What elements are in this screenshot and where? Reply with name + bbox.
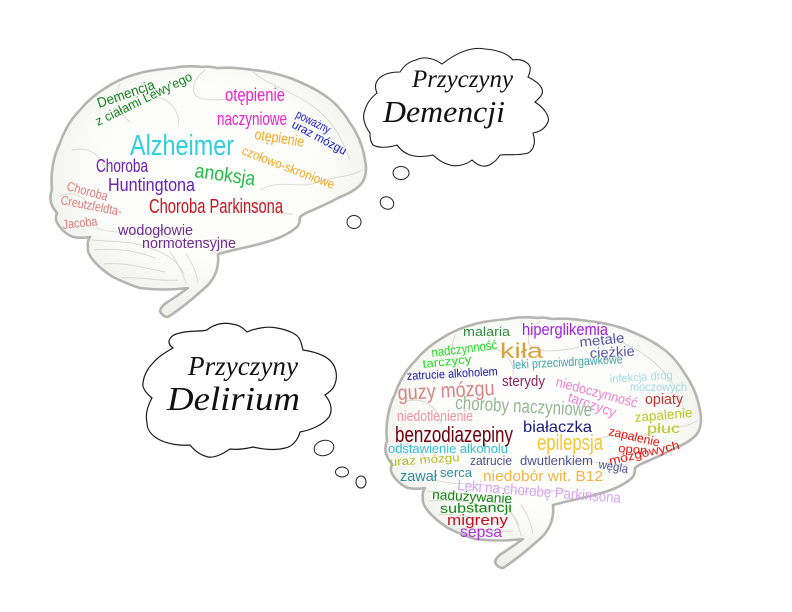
brain outline: [50, 66, 366, 317]
cause: urinary tract infection: moczowych: [630, 382, 687, 394]
cause: frontotemporal dementia: czołowo-skroniowe: [240, 143, 337, 192]
bubble outline: [143, 323, 336, 457]
cause: Lewy body dementia: Demencja: [95, 76, 157, 111]
cause: anticonvulsants: leki przeciwdrgawkowe: [512, 352, 623, 372]
cause: hypothyroidism: tarczycy: [566, 389, 619, 420]
brain outline: [385, 317, 701, 568]
cause: hyperthyroidism: nadczynność: [431, 337, 498, 360]
cause: hypothyroidism: niedoczynność: [554, 373, 640, 411]
cause: hyperglycemia: hiperglikemia: [522, 320, 608, 339]
cause: malaria: malaria: [463, 324, 511, 339]
cause: heavy metals: metale: [579, 329, 625, 350]
cause: carbon monoxide poisoning: dwutlenkiem: [520, 453, 593, 468]
cause: urinary tract infection: [609, 370, 687, 394]
cause: brain tumors: guzy mózgu: [397, 377, 495, 405]
heading: Przyczyny: Przyczyny: [411, 66, 514, 93]
brain: causes of dementia: [50, 66, 366, 317]
cause: vascular disease: choroby naczyniowe: [455, 393, 593, 421]
cause: frontotemporal dementia: otępienie: [253, 126, 305, 151]
cause: heavy metals: ciężkie: [589, 343, 635, 361]
cause: hyperthyroidism: [422, 337, 498, 371]
cause: migraine: migreny: [447, 512, 509, 529]
cause: urinary tract infection: infekcja dróg: [609, 370, 673, 386]
cause: Lewy body dementia: z ciałami Lewy'ego: [93, 69, 195, 129]
cause: meningitis: mózgowych: [608, 438, 681, 468]
cause: brain injury: uraz mózgu: [389, 452, 460, 469]
thought trail: delirium bubble: [312, 438, 366, 488]
cause: normal pressure hydrocephalus: wodogłowie: [117, 222, 193, 239]
cause: epilepsy: epilepsja: [537, 430, 604, 455]
cause: severe brain injury: uraz mózgu: [290, 117, 349, 158]
cause: carbon monoxide poisoning: węgla: [597, 457, 630, 476]
cause: normal pressure hydrocephalus: normotensyjne: [142, 235, 236, 252]
cause: leukemia: białaczka: [523, 419, 592, 436]
cause: Creutzfeldt-Jakob disease: Creutzfeldta-: [59, 192, 123, 219]
bubble outline: [364, 48, 548, 166]
cause: pneumonia: [634, 405, 693, 436]
cause: carbon monoxide poisoning: zatrucie: [470, 453, 512, 468]
cause: Creutzfeldt-Jakob disease: [59, 178, 123, 232]
cause: carbon monoxide poisoning: [470, 453, 630, 476]
cause: Huntington disease: [96, 156, 196, 195]
cause: pneumonia: płuc: [647, 420, 680, 436]
cause: meningitis: [607, 424, 681, 468]
cause: Huntington disease: Huntingtona: [108, 175, 196, 195]
cause: Parkinson disease: Choroba Parkinsona: [149, 196, 284, 218]
cause: Huntington disease: Choroba: [96, 156, 149, 176]
word cloud: causes of delirium: [388, 320, 693, 541]
cause: Creutzfeldt-Jakob disease: Choroba: [65, 178, 110, 204]
cause: vascular dementia: [217, 85, 287, 129]
cause: hyperthyroidism: tarczycy: [422, 352, 472, 371]
cause: steroids: sterydy: [502, 373, 545, 390]
cause: sepsis: sepsa: [460, 524, 502, 541]
cause: hypoxia: niedotlenienie: [397, 408, 473, 425]
cause: Parkinson medication: Leki na chorobę Parkinsona: [457, 477, 622, 507]
cause: heart attack: [400, 465, 473, 485]
cause: vascular dementia: otępienie: [225, 85, 285, 105]
cause: anoxia: anoksja: [193, 160, 258, 191]
cause: meningitis: zapalenie: [607, 424, 661, 450]
heading: Demencji: Demencji: [382, 94, 505, 129]
cause: vitamin B12 deficiency: niedobór wit. B12: [483, 468, 603, 485]
word cloud: causes of dementia: [59, 69, 349, 252]
cause: Alzheimer: Alzheimer: [130, 130, 234, 162]
cause: heart attack: zawał: [400, 468, 438, 485]
cause: severe brain injury: poważny: [294, 107, 333, 136]
heading: Delirium: Delirium: [166, 381, 300, 418]
thought bubble: causes of delirium: [143, 323, 336, 457]
cause: frontotemporal dementia: [240, 126, 337, 192]
cause: pneumonia: zapalenie: [634, 405, 693, 425]
cause: substance abuse: [432, 487, 513, 516]
cause: substance abuse: substancji: [440, 500, 512, 516]
thought trail: dementia bubble: [347, 166, 409, 228]
cause: alcohol withdrawal: odstawienie alkoholu: [388, 441, 508, 456]
heading: Przyczyny: Przyczyny: [187, 351, 298, 381]
cause: syphilis: kiła: [500, 340, 543, 363]
brain: causes of delirium: [385, 317, 701, 568]
cause: substance abuse: nadużywanie: [432, 487, 513, 506]
cause: benzodiazepines: benzodiazepiny: [395, 422, 513, 447]
cause: Creutzfeldt-Jakob disease: Jacoba: [62, 213, 99, 232]
cause: opioids: opiaty: [645, 391, 683, 408]
cause: normal pressure hydrocephalus: [117, 222, 236, 252]
cause: meningitis: opon: [618, 441, 648, 458]
cause: heavy metals: [579, 329, 635, 361]
cause: alcohol intoxication: zatrucie alkoholem: [406, 364, 498, 383]
thought bubble: causes of dementia: [364, 48, 548, 166]
cause: vascular dementia: naczyniowe: [217, 109, 287, 129]
cause: heart attack: serca: [440, 465, 473, 480]
